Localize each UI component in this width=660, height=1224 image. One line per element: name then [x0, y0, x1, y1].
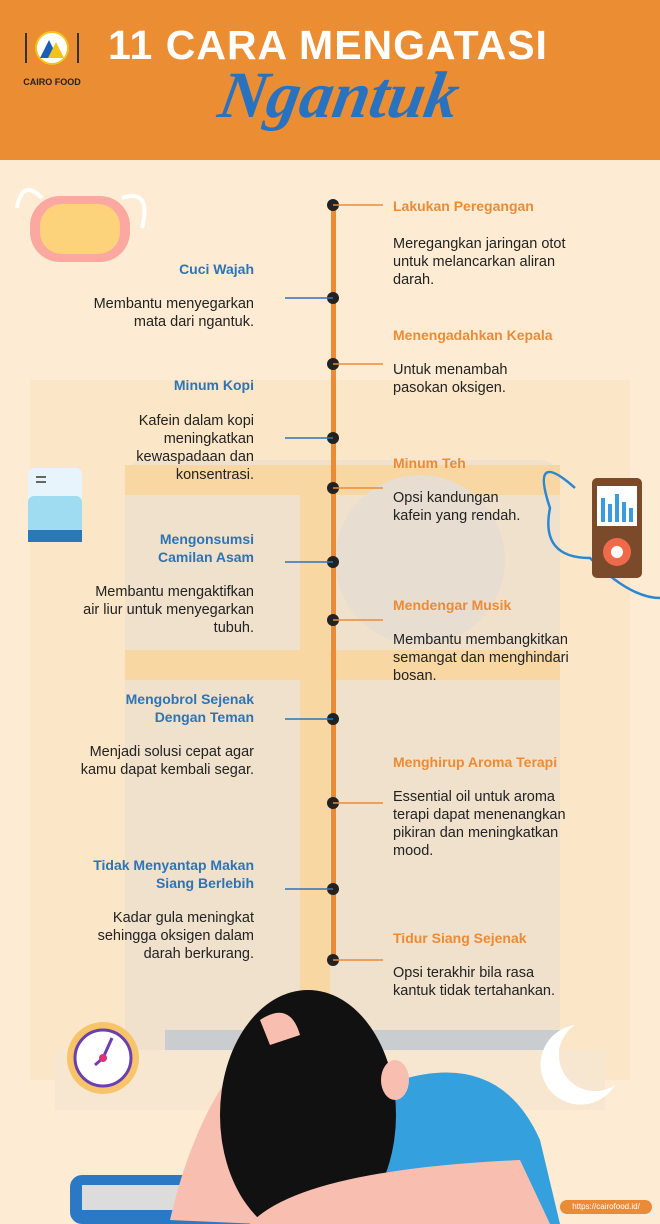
item: Lakukan Peregangan [393, 198, 566, 288]
item: Menghirup Aroma Terapi: mood. [393, 843, 433, 859]
item: Tidak Menyantap Makan Siang [93, 857, 254, 962]
item: Minum Teh: Opsi kandungan [393, 490, 499, 506]
item: Mengonsumsi Camilan Asam: air liur untuk menyegarkan [83, 602, 254, 618]
item: Tidak Menyantap Makan Siang: Siang Berlebih [156, 875, 254, 891]
item: Cuci Wajah: mata dari ngantuk. [134, 314, 254, 330]
item: Menengadahkan Kepala: Untuk menambah [393, 362, 507, 378]
item: Minum Kopi: meningkatkan [164, 431, 254, 447]
item: Minum Teh [393, 455, 520, 524]
url badge: https://cairofood.id/ [572, 1202, 640, 1211]
item: Mengobrol Sejenak: kamu dapat kembali segar. [81, 762, 254, 778]
item: Tidur Siang Sejenak: Tidur Siang Sejenak [393, 930, 527, 946]
item: Menghirup Aroma Terapi: Essential oil untuk aroma [393, 789, 555, 805]
item: Menghirup Aroma Terapi [393, 754, 566, 859]
item: Minum Kopi [136, 377, 254, 483]
timeline [285, 199, 383, 966]
item: Menghirup Aroma Terapi: pikiran dan meningkatkan [393, 825, 558, 841]
subtitle: Ngantuk [214, 59, 465, 132]
item: Mendengar Musik: Membantu membangkitkan [393, 632, 568, 648]
item: Mengonsumsi Camilan Asam [83, 531, 254, 636]
item: Minum Kopi: kewaspadaan dan [136, 449, 254, 465]
item: Mendengar Musik: bosan. [393, 668, 437, 684]
logo [23, 31, 81, 87]
icon: sleep mask [15, 188, 146, 262]
item: Mengobrol Sejenak: Mengobrol Sejenak [126, 691, 254, 707]
alarm clock [67, 1022, 139, 1094]
header [0, 0, 660, 160]
item: Menghirup Aroma Terapi: Menghirup Aroma Terapi [393, 754, 557, 770]
illustration: sleeping person [67, 990, 615, 1224]
item: Minum Teh: Minum Teh [393, 455, 466, 471]
url badge [560, 1200, 652, 1214]
item: Menengadahkan Kepala: Menengadahkan Kepala [393, 327, 552, 343]
logo: CAIRO FOOD [23, 77, 81, 87]
item: Tidak Menyantap Makan Siang: Kadar gula meningkat [113, 910, 254, 926]
item: Cuci Wajah [94, 261, 254, 330]
item: Cuci Wajah: Membantu menyegarkan [94, 296, 254, 312]
item: Minum Teh: kafein yang rendah. [393, 508, 520, 524]
item: Tidur Siang Sejenak: kantuk tidak tertahankan. [393, 983, 555, 999]
item: Lakukan Peregangan: Lakukan Peregangan [393, 198, 534, 214]
item: Mengobrol Sejenak [81, 691, 254, 778]
item: Mendengar Musik: semangat dan menghindari [393, 650, 569, 666]
item: Mengobrol Sejenak: Menjadi solusi cepat agar [90, 744, 254, 760]
item: Tidur Siang Sejenak: Opsi terakhir bila rasa [393, 965, 534, 981]
item: Menengadahkan Kepala [393, 327, 553, 396]
item: Minum Kopi: Minum Kopi [174, 377, 254, 393]
item: Mendengar Musik [393, 597, 569, 684]
item: Menghirup Aroma Terapi: terapi dapat menenangkan [393, 807, 566, 823]
item: Tidur Siang Sejenak [393, 930, 555, 999]
item: Lakukan Peregangan: darah. [393, 272, 434, 288]
item: Mengonsumsi Camilan Asam: tubuh. [214, 620, 254, 636]
item: Tidak Menyantap Makan Siang: Tidak Menyantap Makan [93, 857, 254, 873]
item: Menengadahkan Kepala: pasokan oksigen. [393, 380, 506, 396]
item: Minum Kopi: konsentrasi. [176, 467, 254, 483]
title: 11 CARA MENGATASI [108, 22, 548, 68]
item: Minum Kopi: Kafein dalam kopi [139, 413, 254, 429]
item: Mengonsumsi Camilan Asam: Membantu mengaktifkan [95, 584, 254, 600]
item: Mendengar Musik: Mendengar Musik [393, 597, 511, 613]
icon: music player [542, 470, 660, 600]
icon: glass [28, 468, 82, 542]
item: Mengobrol Sejenak: Dengan Teman [155, 709, 254, 725]
item: Mengonsumsi Camilan Asam: Mengonsumsi [160, 531, 254, 547]
item: Cuci Wajah: Cuci Wajah [179, 261, 254, 277]
item: Tidak Menyantap Makan Siang: darah berkurang. [144, 946, 254, 962]
item: Lakukan Peregangan: untuk melancarkan aliran [393, 254, 555, 270]
item: Lakukan Peregangan: Meregangkan jaringan otot [393, 236, 566, 252]
item: Mengonsumsi Camilan Asam: Camilan Asam [158, 549, 254, 565]
item: Tidak Menyantap Makan Siang: sehingga oksigen dalam [98, 928, 254, 944]
